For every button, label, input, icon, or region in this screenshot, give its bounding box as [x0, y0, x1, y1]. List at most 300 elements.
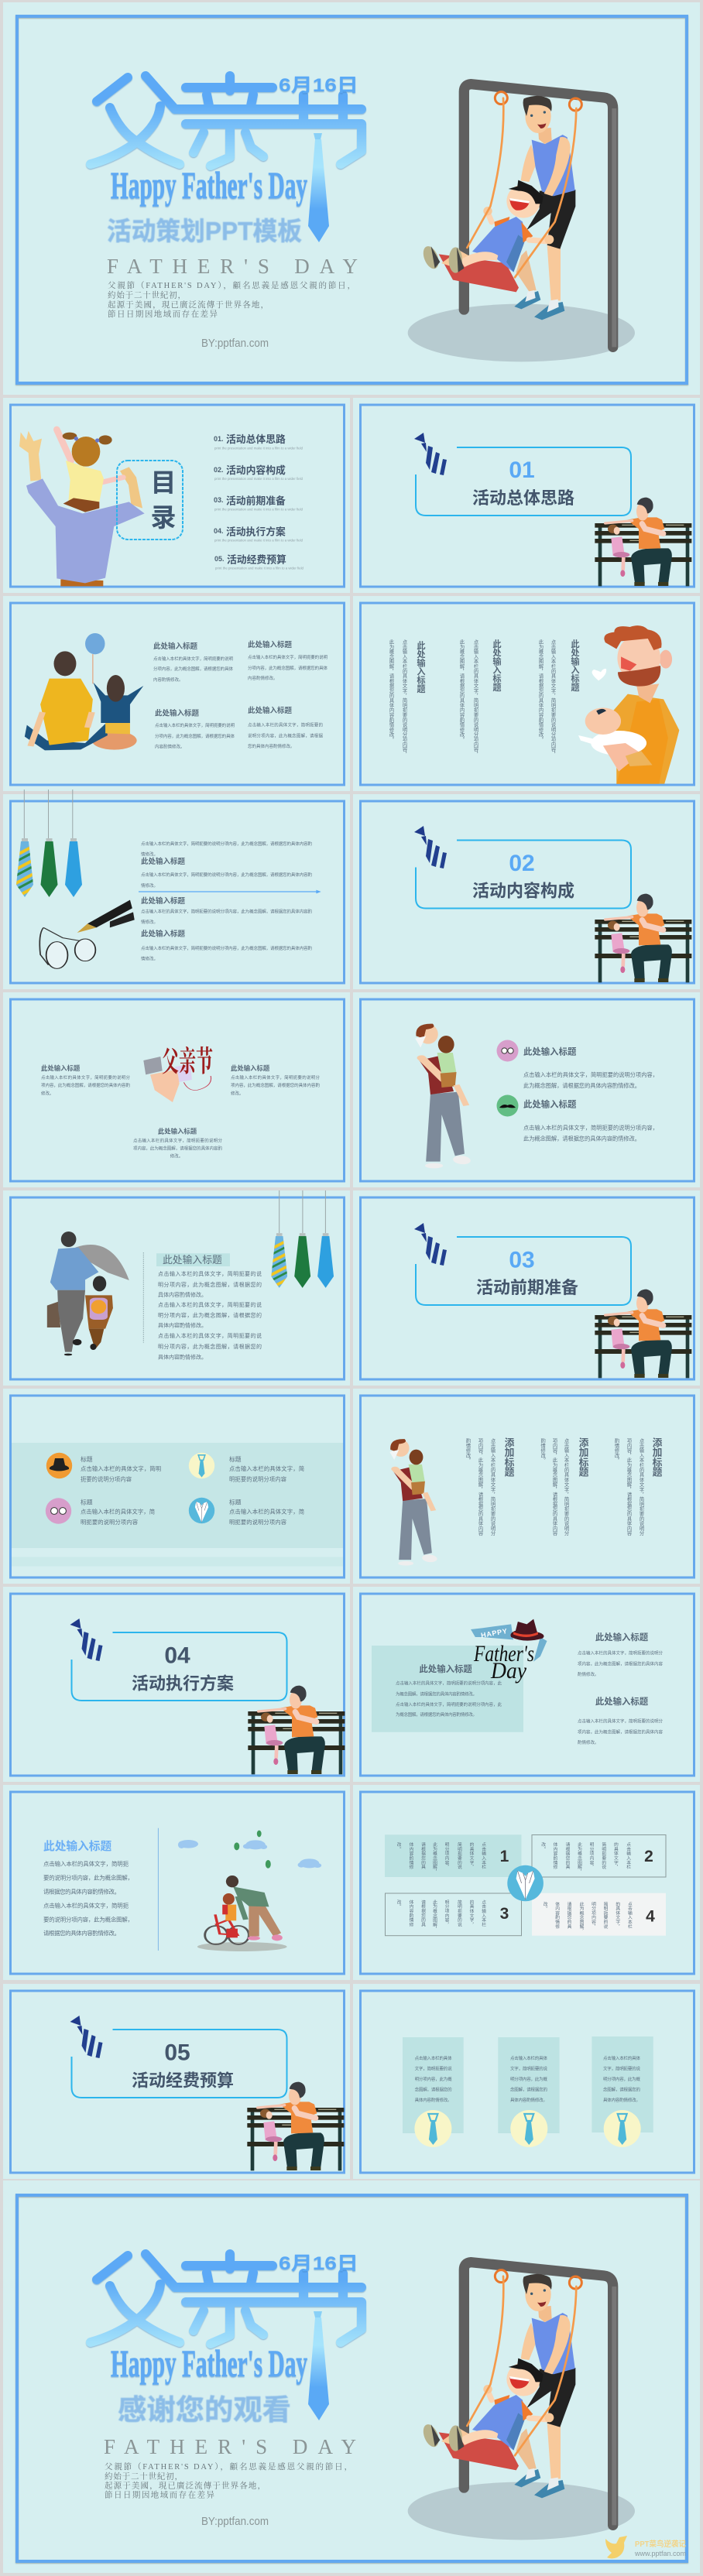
- text group 3: 点击输入本栏的具体文字，简明扼要的说明: [155, 722, 235, 728]
- text entries: 点击输入本栏的具体文字，简明扼要的说明分项内容，此为概念图解，请根据您的具体内容酌: [141, 909, 312, 915]
- body text: [43, 1861, 133, 1937]
- section title: 活动内容构成: [472, 881, 574, 901]
- section number: 01: [509, 457, 535, 483]
- contents list: print the presentation and make it into a film to a wider field: [214, 446, 303, 450]
- illustration: clouds, leaves, father and child on bike: [178, 1831, 321, 1951]
- body text: [158, 1270, 262, 1360]
- column 1: 念图解，请根据您的: [415, 2087, 452, 2093]
- arrow line: [139, 890, 320, 893]
- right text: 此处输入标题: [231, 1064, 270, 1072]
- column 3: 具体内容酌情修改。: [603, 2097, 640, 2103]
- intro paragraph: 約始于二十世紀初，: [108, 289, 186, 300]
- box 4: 请根据您的具: [566, 1901, 571, 1930]
- text group 4: [248, 706, 323, 749]
- item 1 text: [523, 1046, 658, 1089]
- column 1: [389, 639, 426, 756]
- box 4: [532, 1893, 666, 1936]
- text group 3: 内容酌情修改。: [155, 743, 185, 749]
- item 1 text: [81, 1455, 161, 1483]
- column 3: 点击输入本栏的具体文字，简明扼要的说明分项内容，: [550, 639, 556, 756]
- watermark: PPT菜鸟逆袭记: [635, 2539, 686, 2549]
- box 4: 改。: [542, 1901, 547, 1910]
- body text: 请根据您的具体内容酌情修改。: [43, 1930, 120, 1937]
- bottom text: 修改。: [170, 1153, 183, 1160]
- contents list: 活动执行方案: [226, 526, 286, 537]
- body text: 点击输入本栏的具体文字，简明扼: [43, 1861, 129, 1867]
- tie icon: [70, 2016, 102, 2058]
- panel: three columns with tie icons: [353, 1984, 700, 2179]
- box 1: 明分项内容，: [444, 1842, 449, 1869]
- left text: 此处输入标题: [41, 1064, 81, 1072]
- panel: father teaching child to ride bike: [3, 1785, 350, 1980]
- column 2: [458, 639, 502, 756]
- column 2: 酌情修改。: [540, 1437, 545, 1463]
- text entries: 点击输入本栏的具体文字，简明扼要的说明分项内容，此为概念图解，请根据您的具体内容酌: [141, 945, 312, 951]
- right text: [231, 1064, 320, 1096]
- item 4 text: 点击输入本栏的具体文字，简: [229, 1508, 304, 1516]
- rounded title box: [416, 447, 631, 516]
- item 1 text: 标题: [81, 1455, 93, 1463]
- icon: glasses circle: [497, 1040, 519, 1062]
- box 2: 的具体文字，: [612, 1841, 618, 1869]
- body text: 要的说明分项内容，此为概念图解，: [43, 1875, 133, 1881]
- text group 4: 说明分项内容，此为概念图解，请根据: [248, 732, 323, 738]
- watermark: www.pptfan.com: [634, 2550, 686, 2557]
- item 2 text: 此处输入标题: [523, 1099, 577, 1110]
- intro paragraph: 起源于美國，現已廣泛流傳于世界各地，: [108, 300, 269, 310]
- column 3: 此为概念图解，请根据您的具体内容酌情修改。: [537, 639, 544, 742]
- tie icon: [70, 1619, 102, 1661]
- left text: 为概念图解，请根据您的具体内容酌情修改。: [396, 1690, 477, 1697]
- column 3: [592, 2036, 653, 2147]
- box 3: 体内容酌情修: [408, 1899, 413, 1927]
- text group 2: 此处输入标题: [248, 640, 293, 649]
- panel: Father's Day badge with text: [353, 1587, 700, 1782]
- box 1: 点击输入本栏: [481, 1841, 486, 1870]
- box 3: 3: [500, 1905, 509, 1923]
- text entries: 此处输入标题: [141, 857, 186, 866]
- right text: 点击输入本栏的具体文字，简明扼要的说明分: [231, 1074, 320, 1081]
- panel: four icon items on band: [3, 1389, 350, 1584]
- column 3: 明分项内容，此为概: [603, 2076, 640, 2082]
- logo: hands and calligraphy: [143, 1046, 213, 1102]
- body text: 明分项内容，此为概念图解，请根据您的: [158, 1343, 262, 1350]
- column 3: 点击输入本栏的具体文字，简明扼要的说明分: [638, 1438, 644, 1536]
- text group 4: 此处输入标题: [248, 706, 293, 715]
- column 3: 酌情修改。: [613, 1437, 619, 1463]
- item 4 text: 标题: [229, 1499, 242, 1506]
- text group 1: [153, 642, 233, 683]
- rounded title box: [416, 1237, 631, 1305]
- panel: cover slide: [3, 2, 700, 395]
- right text 2: 项内容，此为概念图解，请根据您的具体内容: [578, 1729, 663, 1735]
- box 1: 改。: [396, 1841, 401, 1852]
- illustration: father and son walking under umbrella: [47, 1231, 129, 1355]
- closing title art with tie: [91, 2254, 362, 2420]
- text entries: 情修改。: [141, 882, 158, 889]
- contents list: 05.: [214, 555, 225, 563]
- text entries: 点击输入本栏的具体文字，简明扼要的说明分项内容，此为概念图解，请根据您的具体内容酌: [141, 872, 312, 878]
- panel: table of contents: 录: [150, 503, 177, 532]
- panel: father and son with umbrella: [3, 1190, 350, 1386]
- text entries: 情修改。: [141, 851, 158, 858]
- box 2: 改。: [540, 1841, 545, 1852]
- right text 1: 点击输入本栏的具体文字，简明扼要的说明分: [578, 1650, 663, 1656]
- box 1: [385, 1834, 522, 1877]
- item 4 text: [229, 1499, 304, 1526]
- item 2 text: [523, 1099, 658, 1142]
- date: 6月16日: [279, 75, 358, 96]
- illustration: father carrying son: [415, 1024, 473, 1168]
- box 1: 体内容酌情修: [408, 1841, 413, 1870]
- icon: three ties: [13, 838, 82, 899]
- heading: 此处输入标题: [43, 1839, 111, 1853]
- column 1: 酌情修改。: [465, 1437, 471, 1463]
- right text 2: 此处输入标题: [595, 1696, 649, 1707]
- item 2 text: 明扼要的说明分项内容: [229, 1476, 286, 1483]
- box 1: 此为概念图解，: [432, 1841, 437, 1874]
- column 2: [540, 1437, 588, 1536]
- column 2: 此为概念图解，请根据您的具体内容酌情修改。: [458, 639, 465, 742]
- item 1 text: 此处输入标题: [523, 1046, 577, 1057]
- column 2: 项内容，此为概念图解，请根据您的具体内容: [551, 1438, 557, 1536]
- date: 6月16日: [279, 2253, 358, 2274]
- intro paragraph: 節日日期因地域而存在差异: [105, 2489, 215, 2500]
- item 2 text: [229, 1455, 304, 1483]
- body text: 点击输入本栏的具体文字，简明扼: [43, 1903, 129, 1909]
- panel: closing slide: [3, 2180, 700, 2573]
- box 3: 此为概念图解，: [432, 1899, 437, 1931]
- credit: BY:pptfan.com: [201, 337, 269, 350]
- right text 2: 酌情修改。: [578, 1739, 599, 1745]
- box 1: 简明扼要的说: [456, 1841, 461, 1870]
- intro paragraph: 起源于美國，現已廣泛流傳于世界各地，: [105, 2480, 266, 2491]
- box 4: 简明扼要的说: [602, 1901, 608, 1930]
- text entries: 此处输入标题: [141, 929, 186, 938]
- text group 2: 内容酌情修改。: [248, 675, 278, 681]
- column 2: 具体内容酌情修改。: [510, 2097, 547, 2103]
- box 4: 体内容酌情修: [554, 1901, 559, 1930]
- panel: vertical text columns with bearded father: [353, 596, 700, 791]
- box 3: 简明扼要的说: [456, 1899, 461, 1927]
- column 2: 念图解，请根据您的: [510, 2087, 547, 2093]
- item 2 text: 点击输入本栏的具体文字，简: [229, 1465, 304, 1472]
- box 1: 请根据您的具: [420, 1841, 425, 1870]
- text entries: [141, 841, 312, 961]
- left text: 为概念图解，请根据您的具体内容酌情修改。: [396, 1711, 477, 1718]
- column 1: 添加标题: [503, 1437, 514, 1478]
- intro paragraph: 約始于二十世紀初，: [105, 2471, 183, 2482]
- box 2: 点击输入本栏: [626, 1841, 630, 1870]
- panel: section 02: [353, 794, 700, 989]
- subtitle: 活动策划PPT模板: [107, 217, 302, 245]
- text entries: 情修改。: [141, 919, 158, 925]
- column 1: [465, 1437, 514, 1536]
- box 3: 点击输入本栏: [481, 1899, 486, 1927]
- text group 3: 此处输入标题: [155, 709, 200, 718]
- illustration: father and daughter with balloon: [25, 633, 143, 750]
- box 2: 体内容酌情修: [552, 1841, 557, 1870]
- left text: 点击输入本栏的具体文字，简明扼要的说明分项内容，此: [396, 1680, 502, 1686]
- dashed title box: [117, 461, 183, 540]
- icon: pen and glasses: [39, 900, 135, 968]
- section title: 活动经费预算: [132, 2071, 234, 2090]
- column 3: 点击输入本栏的具体: [603, 2055, 640, 2061]
- column 1: 点击输入本栏的具体: [415, 2055, 452, 2061]
- column 1: 此为概念图解，请根据您的具体内容酌情修改。: [389, 639, 394, 742]
- badge: Happy Father's Day: Day: [490, 1658, 527, 1684]
- box 2: 简明扼要的说: [601, 1841, 606, 1870]
- left text: 修改。: [41, 1090, 54, 1096]
- bottom text: 点击输入本栏的具体文字，简明扼要的说明分: [133, 1138, 222, 1144]
- intro paragraph: [108, 280, 355, 319]
- body text: 具体内容酌情修改。: [158, 1291, 207, 1298]
- panel: section 04: [3, 1587, 350, 1782]
- item 3 text: 点击输入本栏的具体文字，简: [81, 1508, 155, 1516]
- item 3 text: 标题: [81, 1499, 93, 1506]
- right text 1: 酌情修改。: [578, 1671, 599, 1677]
- body text: 点击输入本栏的具体文字，简明扼要的说: [158, 1270, 262, 1277]
- column 3: [537, 639, 580, 756]
- contents list: 活动内容构成: [226, 464, 286, 476]
- box 4: 此为概念图解，: [578, 1901, 584, 1933]
- bottom text: 此处输入标题: [158, 1127, 197, 1135]
- box 4: 的具体文字，: [615, 1901, 620, 1929]
- column 1: 文字，简明扼要的说: [415, 2065, 452, 2071]
- box 2: [532, 1834, 666, 1877]
- column 3: 文字，简明扼要的说: [603, 2065, 640, 2071]
- contents list: print the presentation and make it into a film to a wider field: [214, 508, 303, 511]
- cover title art with tie: [91, 76, 362, 242]
- dotted divider: [142, 1252, 144, 1343]
- badge: Happy Father's Day: Father's: [473, 1641, 534, 1667]
- icon: three ties: [268, 1233, 334, 1290]
- box 3: 明分项内容，: [444, 1899, 449, 1927]
- left text: 此处输入标题: [419, 1663, 472, 1674]
- text group 3: [155, 709, 235, 749]
- box 3: 的具体文字，: [468, 1899, 474, 1927]
- illustration: father and daughter on bench: [595, 498, 691, 586]
- rounded title box: [416, 841, 631, 909]
- text group 2: 点击输入本栏的具体文字，简明扼要的说明: [248, 654, 327, 660]
- column 1: 项内容，此为概念图解，请根据您的具体内容: [477, 1438, 483, 1536]
- item 3 text: [81, 1499, 155, 1526]
- illustration: girl on father's shoulders: [19, 430, 145, 586]
- icon: hat: [46, 1453, 72, 1478]
- illustration: father and daughter on bench: [248, 1686, 345, 1774]
- column 2: 文字，简明扼要的说: [510, 2065, 547, 2071]
- bottom text: [133, 1127, 222, 1160]
- illustration: father and daughter on bench: [595, 1290, 691, 1378]
- tie icon: [414, 433, 447, 475]
- column 3: 添加标题: [650, 1437, 663, 1478]
- contents list: print the presentation and make it into a film to a wider field: [215, 567, 304, 570]
- intro paragraph: 父親節（FATHER'S DAY），顧名思義是感恩父親的節日，: [108, 280, 355, 290]
- left text: [41, 1064, 130, 1096]
- rounded title box: [71, 1632, 286, 1701]
- box 2: 此为概念图解，: [576, 1841, 581, 1874]
- illustration: father and daughter on bench: [595, 894, 691, 982]
- badge: Happy Father's Day: HAPPY: [480, 1627, 508, 1639]
- Happy Father's Day heading: Happy Father's Day: [111, 163, 307, 207]
- box 4: 明分项内容，: [590, 1902, 595, 1929]
- column 1: [403, 2037, 464, 2147]
- body text: 点击输入本栏的具体文字，简明扼要的说: [158, 1332, 262, 1339]
- hanging strings: [24, 790, 73, 839]
- text group 4: 您的具体内容酌情修改。: [248, 743, 295, 749]
- right text 1: 项内容，此为概念图解，请根据您的具体内容: [578, 1661, 663, 1667]
- divider: [157, 1828, 159, 1951]
- item 2 text: 此为概念图解，请根据您的具体内容酌情修改。: [523, 1135, 640, 1142]
- section title: 活动执行方案: [132, 1673, 234, 1694]
- left text: 项内容，此为概念图解，请根据您的具体内容酌: [41, 1082, 130, 1088]
- column 1: 点击输入本栏的具体文字，简明扼要的说明分项内容，: [401, 639, 407, 756]
- contents list: 活动总体思路: [226, 433, 286, 445]
- text group 1: 分项内容，此为概念图解，请根据您的具体: [153, 666, 233, 672]
- right text 2: 点击输入本栏的具体文字，简明扼要的说明分: [578, 1718, 663, 1725]
- band: [12, 1443, 343, 1548]
- contents list: 活动经费预算: [227, 554, 286, 565]
- Happy Father's Day heading: Happy Father's Day: [111, 2341, 307, 2385]
- left text: 点击输入本栏的具体文字，简明扼要的说明分项内容，此: [396, 1701, 502, 1708]
- box 3: 改。: [396, 1899, 401, 1909]
- column 1: 明分项内容，此为概: [415, 2076, 452, 2082]
- panel: father carrying son with two items: [353, 992, 700, 1187]
- right text 1: 此处输入标题: [595, 1632, 649, 1643]
- FATHER'S DAY: FATHER'S DAY: [104, 2435, 356, 2458]
- text group 2: 分项内容，此为概念图解，请根据您的具体: [248, 665, 327, 671]
- body text: 具体内容酌情修改。: [158, 1322, 207, 1328]
- item 1 text: 扼要的说明分项内容: [81, 1476, 132, 1483]
- body text: 明分项内容，此为概念图解，请根据您的: [158, 1281, 262, 1288]
- column 3: [613, 1437, 663, 1536]
- left text: [396, 1663, 502, 1718]
- column 2: 点击输入本栏的具体文字，简明扼要的说明分项内容，: [472, 639, 478, 756]
- column 2: 添加标题: [578, 1437, 588, 1478]
- bottom text: 项内容，此为概念图解，请根据您的具体内容酌: [133, 1146, 222, 1152]
- section number: 02: [509, 851, 535, 876]
- item 4 text: 明扼要的说明分项内容: [229, 1519, 286, 1526]
- column 2: 明分项内容，此为概: [510, 2076, 547, 2082]
- intro paragraph: [105, 2461, 352, 2500]
- rounded title box: [71, 2030, 286, 2098]
- section number: 03: [509, 1248, 535, 1273]
- column 1: 此处输入标题: [416, 640, 426, 694]
- contents list: 02.: [214, 466, 224, 474]
- text group 4: 点击输入本栏的具体文字，简明扼要的: [248, 721, 323, 728]
- panel: table of contents: [3, 398, 350, 593]
- FATHER'S DAY: FATHER'S DAY: [107, 255, 358, 278]
- item 2 text: 点击输入本栏的具体文字，简明扼要的说明分项内容，: [523, 1124, 658, 1132]
- column 1: 具体内容酌情修改。: [415, 2097, 452, 2103]
- text group 3: 分项内容，此为概念图解，请根据您的具体: [155, 733, 235, 739]
- body text: 点击输入本栏的具体文字，简明扼要的说: [158, 1301, 262, 1308]
- right text: 修改。: [231, 1090, 244, 1096]
- heading: 此处输入标题: [163, 1254, 222, 1266]
- box 1: 的具体文字，: [468, 1841, 474, 1869]
- box 2: 明分项内容，: [588, 1842, 594, 1869]
- intro paragraph: 節日日期因地域而存在差异: [108, 309, 218, 319]
- icon: glasses on pink: [46, 1498, 71, 1524]
- box 3: [386, 1893, 522, 1936]
- text entries: 此处输入标题: [141, 896, 186, 906]
- text group 1: 点击输入本栏的具体文字，简明扼要的说明: [153, 656, 233, 662]
- column 2: 点击输入本栏的具体: [510, 2055, 547, 2061]
- item 2 text: 标题: [229, 1455, 242, 1463]
- tie icon: [414, 826, 447, 868]
- illustration: father pushing son on swing: [408, 84, 635, 361]
- panel: four text groups with father and daughter: [3, 596, 350, 791]
- column 2: 点击输入本栏的具体文字，简明扼要的说明分: [564, 1438, 569, 1536]
- right text 2: [578, 1696, 663, 1745]
- panel: section 05: [3, 1984, 350, 2179]
- contents list: 04.: [214, 527, 224, 535]
- intro paragraph: 父親節（FATHER'S DAY），顧名思義是感恩父親的節日，: [105, 2461, 352, 2472]
- icon: tie on yellow: [189, 1453, 214, 1478]
- credit: BY:pptfan.com: [201, 2515, 269, 2528]
- contents list: 01.: [214, 435, 224, 443]
- column 3: 此处输入标题: [570, 639, 580, 692]
- watermark: [605, 2536, 686, 2559]
- right text 1: [578, 1632, 663, 1677]
- panel: section 03: [353, 1190, 700, 1386]
- text entries: 点击输入本栏的具体文字，简明扼要的说明分项内容，此为概念图解，请根据您的具体内容酌: [141, 841, 312, 847]
- panel: section 01: [353, 398, 700, 593]
- body text: 请根据您的具体内容酌情修改。: [43, 1889, 120, 1895]
- column 3: 项内容，此为概念图解，请根据您的具体内容: [626, 1438, 632, 1536]
- icon: center suit circle: [507, 1865, 544, 1901]
- text entries: 情修改。: [141, 955, 158, 961]
- contents title: 目: [150, 468, 177, 497]
- box 2: 2: [644, 1848, 653, 1865]
- hanging strings: [279, 1190, 325, 1233]
- box 4: 点击输入本栏: [626, 1901, 632, 1930]
- box 3: 请根据您的具: [420, 1899, 425, 1927]
- item 1 text: 点击输入本栏的具体文字，简明: [81, 1465, 161, 1472]
- text group 1: 内容酌情修改。: [153, 677, 183, 683]
- body text: 具体内容酌情修改。: [158, 1353, 207, 1360]
- body text: 要的说明分项内容，此为概念图解，: [43, 1917, 133, 1923]
- section title: 活动总体思路: [472, 488, 574, 508]
- box 1: 1: [500, 1848, 509, 1865]
- text group 1: 此处输入标题: [153, 642, 198, 651]
- panel: ties, pen and glasses: [3, 790, 350, 989]
- badge: Happy Father's Day: [471, 1619, 547, 1684]
- section number: 04: [164, 1643, 190, 1669]
- contents list: [214, 433, 304, 570]
- box 4: 4: [646, 1907, 655, 1926]
- left text: 点击输入本栏的具体文字，简明扼要的说明分: [41, 1074, 130, 1081]
- panel: four numbered boxes: [353, 1785, 700, 1980]
- illustration: father pushing son on swing: [408, 2263, 635, 2540]
- column 2: [498, 2037, 560, 2147]
- icon: suit on blue: [189, 1498, 214, 1523]
- contents list: 活动前期准备: [226, 495, 286, 506]
- item 1 text: 此为概念图解，请根据您的具体内容酌情修改。: [523, 1082, 640, 1089]
- right text: 项内容，此为概念图解，请根据您的具体内容酌: [231, 1082, 320, 1088]
- panel: three text groups around logo: [3, 992, 350, 1187]
- highlight block: [372, 1646, 523, 1732]
- section title: 活动前期准备: [476, 1278, 578, 1297]
- column 3: 念图解，请根据您的: [603, 2087, 640, 2093]
- panel: three vertical columns with father carrying son: [353, 1389, 700, 1584]
- heading box: [156, 1253, 230, 1266]
- icon: mustache circle: [497, 1094, 519, 1116]
- illustration: bearded father with baby: [578, 625, 679, 784]
- text group 2: [248, 640, 327, 681]
- item 1 text: 点击输入本栏的具体文字，简明扼要的说明分项内容，: [523, 1071, 658, 1078]
- illustration: father carrying son: [389, 1439, 439, 1566]
